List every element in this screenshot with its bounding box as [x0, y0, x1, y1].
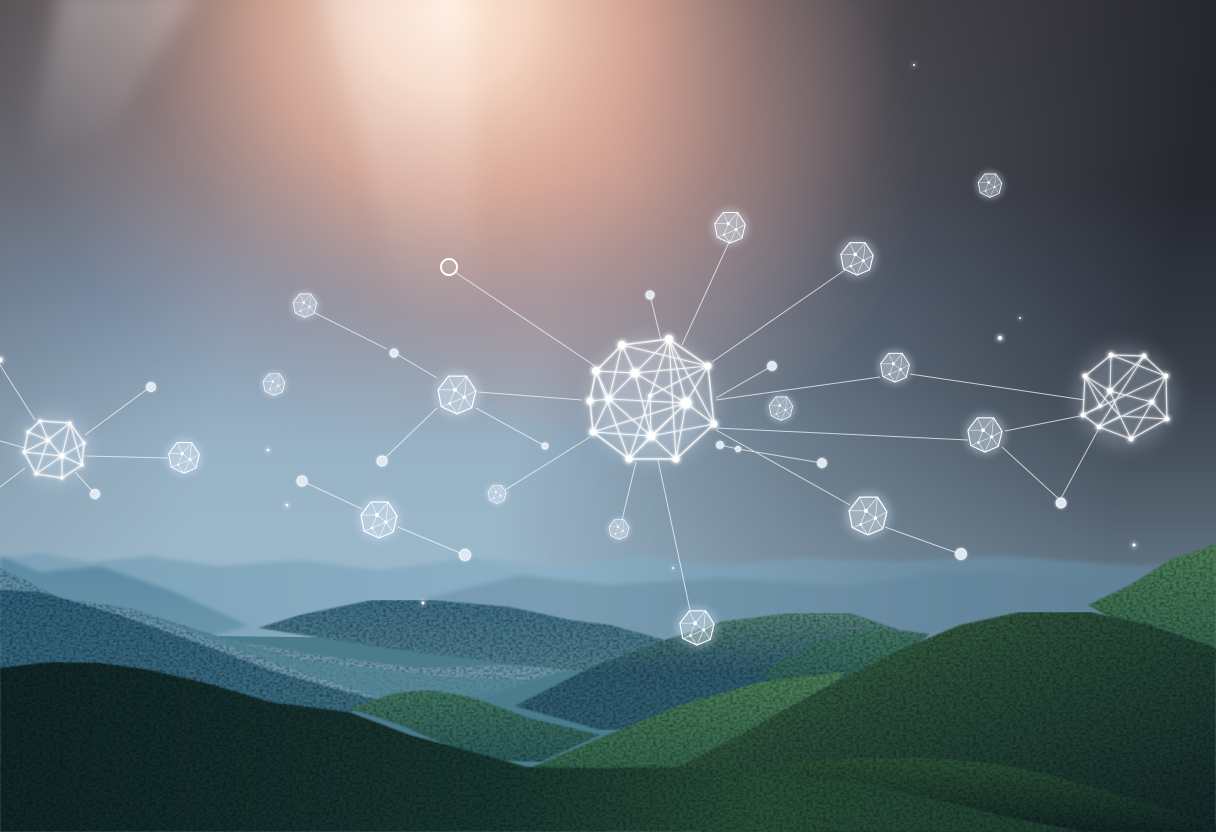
- ring node: [441, 259, 457, 275]
- hub nodes: [586, 335, 718, 462]
- left mid slope: [0, 568, 575, 705]
- far right hill: [1088, 544, 1216, 660]
- foreground hill: [0, 662, 1085, 832]
- left dark hill: [0, 590, 390, 712]
- far mountain range: [0, 553, 1216, 832]
- small central hump: [348, 690, 600, 762]
- central back ridge: [258, 600, 672, 672]
- distant blue haze ridge: [420, 570, 1120, 640]
- sun rays: [30, 0, 480, 320]
- small round nodes: [90, 291, 1066, 560]
- valley base: [0, 636, 1216, 832]
- right network cluster: [1075, 347, 1175, 447]
- hub lattice: [590, 339, 714, 459]
- polyhedron nodes: [165, 171, 1006, 648]
- green shoulder: [760, 630, 925, 700]
- sky background: [0, 0, 1216, 640]
- central network hub: [586, 335, 718, 462]
- tiny stars: [0, 64, 1136, 604]
- green foothill: [530, 672, 845, 775]
- hills: [0, 544, 1216, 832]
- centre hump: [515, 613, 930, 730]
- large right hill: [676, 612, 1216, 832]
- left slope lit ridge: [130, 610, 575, 704]
- left network cluster: [18, 413, 90, 485]
- network links: [0, 240, 1098, 610]
- lower right hill: [775, 758, 1216, 832]
- far left hill: [0, 556, 250, 660]
- hub glow: [590, 338, 714, 462]
